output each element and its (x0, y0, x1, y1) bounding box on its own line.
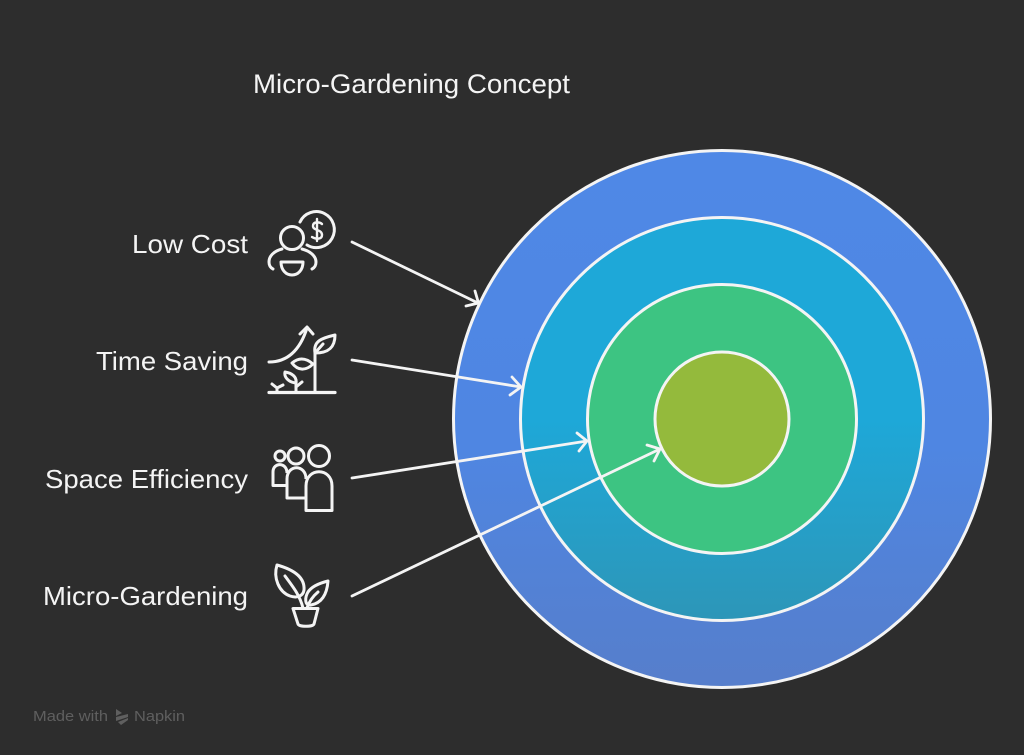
icon: person with dollar coin (269, 212, 334, 275)
ring: Low Cost (454, 150, 990, 688)
ring: Time Saving (520, 218, 924, 620)
arrow: Time Saving to second ring (352, 360, 521, 395)
title: Micro-Gardening Concept (253, 69, 570, 99)
ring: Space Efficiency (588, 284, 856, 554)
label: Micro-Gardening: Micro-Gardening (43, 581, 248, 611)
arrow: Low Cost to outer ring (352, 242, 478, 306)
icon: Napkin logo (116, 709, 128, 725)
label: Time Saving: Time Saving (96, 346, 248, 376)
arrow: Micro-Gardening to core (352, 445, 660, 596)
arrow: Space Efficiency to third ring (352, 433, 587, 478)
label: Low Cost: Low Cost (132, 229, 249, 259)
watermark: Made with Napkin: Made with (33, 708, 108, 725)
ring: Micro-Gardening (655, 352, 789, 486)
watermark: Made with Napkin (33, 708, 185, 725)
icon: group of people (273, 446, 332, 510)
concentric circles chart (454, 150, 990, 688)
watermark: Made with Napkin: Napkin (134, 708, 185, 725)
icon: potted plant (276, 565, 328, 626)
icon: plant growth (269, 327, 335, 392)
label: Space Efficiency: Space Efficiency (45, 464, 248, 494)
